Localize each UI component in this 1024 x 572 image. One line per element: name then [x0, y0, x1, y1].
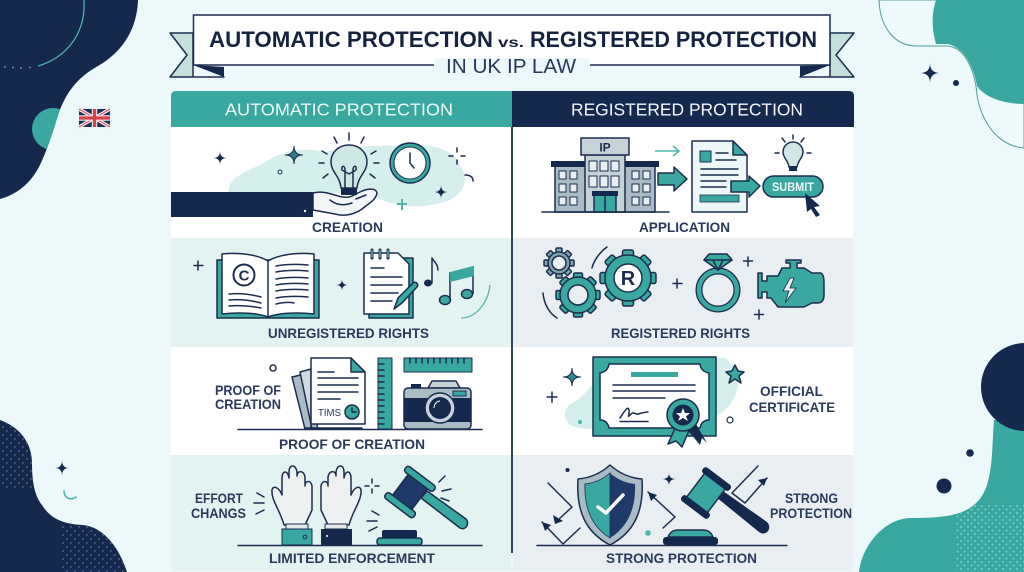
label: UNREGISTERED RIGHTS: [268, 325, 429, 341]
icon: arrows: [542, 466, 767, 544]
icon: camera: [404, 381, 471, 429]
icon: music notes: [424, 258, 490, 318]
title text: REGISTERED PROTECTION: [530, 27, 817, 52]
row: application: [542, 135, 823, 235]
column header: automatic protection: [171, 91, 512, 127]
column header: automatic protection: AUTOMATIC PROTECTION: [225, 100, 453, 120]
row: registered rights: [543, 247, 824, 341]
icon: gavel: [377, 465, 468, 545]
side label: STRONG: [785, 490, 838, 506]
side label: OFFICIAL: [760, 383, 823, 399]
title text: AUTOMATIC PROTECTION: [209, 27, 493, 52]
icon: document: [692, 141, 747, 212]
title text: vs.: [498, 34, 524, 50]
icon: horizontal ruler: [404, 358, 472, 372]
baseline: [238, 544, 482, 546]
column header: registered protection: REGISTERED PROTECTION: [571, 100, 803, 120]
icon: backdrop blob: [565, 358, 738, 431]
ribbon tails: [170, 33, 854, 77]
icon: open book: C: [239, 268, 250, 284]
side label: PROTECTION: [770, 505, 852, 521]
icon: decorations: [547, 365, 744, 424]
icon: right hand: [321, 466, 361, 545]
icon: clock: [390, 143, 430, 183]
icon: arrows: [655, 146, 687, 191]
icon: arrow to submit: [731, 176, 760, 197]
row: unregistered rights: [194, 250, 490, 341]
background shapes: top left: [0, 0, 138, 199]
side label: PROOF OF: [215, 382, 281, 398]
side label: CHANGS: [191, 505, 246, 521]
icon: plus signs: [673, 257, 764, 319]
label: REGISTERED RIGHTS: [611, 325, 750, 341]
icon: notepad and pencil: [364, 250, 418, 318]
row: proof of creation: [215, 358, 482, 452]
icon: UK flag: [79, 109, 110, 127]
side label: CREATION: [215, 396, 281, 412]
icon: IP building: [542, 138, 669, 212]
icon: small circle: [270, 365, 276, 371]
side label: EFFORT: [195, 490, 243, 506]
background shapes: top right: [879, 0, 1024, 148]
icon: submit button: [763, 176, 823, 197]
icon: gears: [543, 247, 656, 318]
icon: shield: [578, 465, 642, 545]
panel: comparison table backgrounds: [171, 127, 853, 571]
icon: background cloud: [229, 145, 465, 206]
row: strong protection: [537, 465, 852, 566]
icon: sparkles: [213, 146, 473, 210]
label: PROOF OF CREATION: [279, 436, 425, 452]
subtitle: IN UK IP LAW: [446, 56, 576, 78]
row: official certificate: [547, 357, 835, 447]
column header: registered protection: [512, 91, 854, 127]
icon: diamond ring: [699, 254, 737, 309]
side label: CERTIFICATE: [749, 399, 835, 415]
icon: gavel: [663, 466, 769, 545]
icon: left hand: [272, 466, 312, 545]
label: LIMITED ENFORCEMENT: [269, 550, 435, 566]
icon: IP building: IP: [599, 140, 611, 154]
icon: engine: [758, 260, 824, 307]
row: limited enforcement: [191, 465, 482, 566]
row: creation: [171, 133, 473, 235]
icon: document stack: [292, 358, 365, 429]
label: CREATION: [312, 219, 383, 235]
background shapes: bottom left: [0, 420, 128, 572]
icon: hand: [171, 189, 377, 217]
icon: certificate: [593, 357, 716, 447]
icon: vertical ruler: [378, 358, 392, 429]
icon: submit button: SUBMIT: [772, 182, 814, 194]
icon: small bulb: [775, 135, 811, 171]
background shapes: bottom right: [859, 343, 1024, 572]
icon: action lines right: [439, 476, 451, 501]
baseline: [238, 428, 482, 430]
icon: gears: R: [621, 268, 636, 290]
icon: cursor: [805, 193, 820, 217]
icon: sparkles: [194, 261, 348, 291]
title banner: [170, 15, 854, 78]
icon: light bulb: [319, 133, 379, 195]
title box: [194, 15, 830, 65]
icon: document stack: TIMS: [318, 407, 341, 419]
icon: open book: [217, 253, 319, 318]
icon: sparkle and dots: [566, 468, 676, 536]
label: STRONG PROTECTION: [606, 550, 757, 566]
baseline: [537, 544, 787, 546]
label: APPLICATION: [639, 219, 730, 235]
icon: action lines: [254, 479, 379, 531]
